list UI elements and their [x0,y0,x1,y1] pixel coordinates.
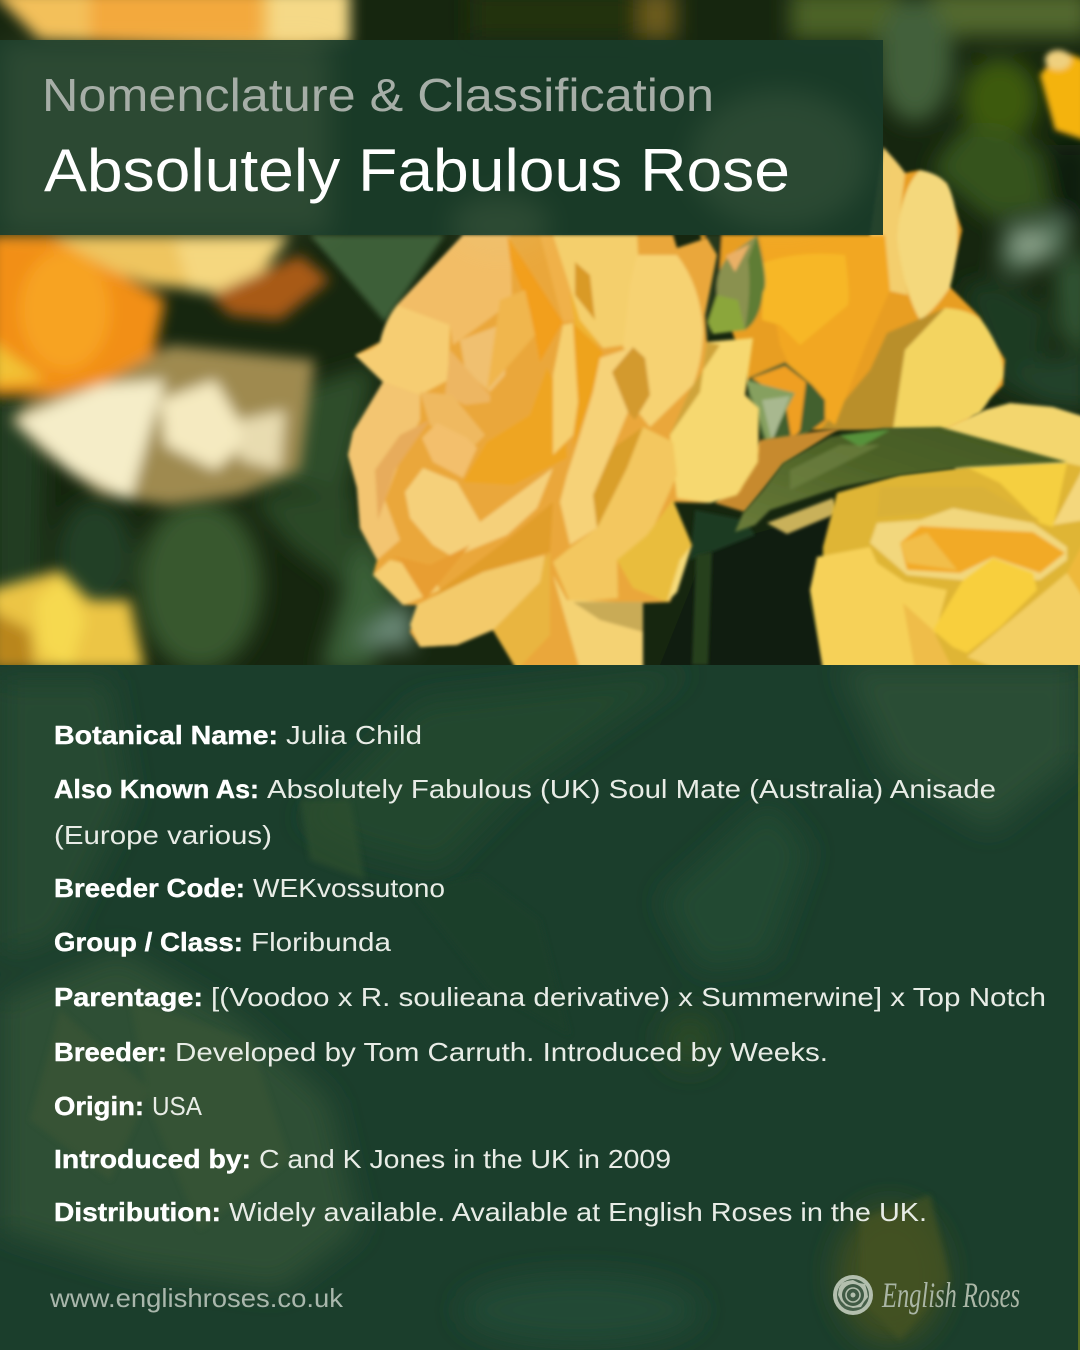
distribution: Distribution: [54,1197,221,1227]
icon: rose in circle [833,1275,873,1315]
blurred foliage [0,0,1080,670]
soft leaf upper centre [310,235,445,322]
also known as [54,774,996,850]
group / class: Floribunda [251,927,392,957]
icon: green rose bud [714,235,767,330]
origin: Origin: [54,1091,144,1121]
parentage: Parentage: [54,982,203,1012]
silhouette [348,235,759,670]
introduced by: Introduced by: [54,1144,251,1174]
left outer petals [355,305,450,395]
heading: subtitle: Nomenclature & Classification [42,69,714,121]
right orange rose behind [695,147,1005,447]
tan petal behind leaf [715,428,840,512]
botanical name: Botanical Name: [54,720,278,750]
bud near rose [702,235,724,336]
breeder code: Breeder Code: [54,873,245,903]
breeder: Breeder: [54,1037,167,1067]
parentage: [(Voodoo x R. soulieana derivative) x Summerwine] x Top Notch [211,982,1046,1012]
also known as: Also Known As: [54,774,259,804]
main rose [348,235,759,670]
heading: main title: Absolutely Fabulous Rose [44,137,790,204]
breeder code: WEKvossutono [253,873,445,903]
panel: details background [0,665,1080,1350]
also known as: (Europe various) [54,820,272,850]
blurred yellow rose top right [1040,50,1080,140]
botanical name [54,720,422,750]
origin: USA [152,1091,203,1121]
blurred top-left roses [0,0,350,670]
origin [54,1091,203,1121]
dark space under leaf [660,520,828,665]
group / class: Group / Class: [54,927,243,957]
right petals [553,235,640,348]
introduced by [54,1144,671,1174]
breeder code [54,873,445,903]
breeder: Developed by Tom Carruth. Introduced by Weeks. [175,1037,828,1067]
rose photograph background [0,0,1080,670]
lower left [405,468,553,557]
also known as: Absolutely Fabulous (UK) Soul Mate (Australia) Anisade [267,774,996,804]
footer website: www.englishroses.co.uk [49,1283,344,1313]
banner ghost foliage [0,40,870,255]
text block: rose details [54,720,1046,1227]
introduced by: C and K Jones in the UK in 2009 [259,1144,671,1174]
pale blurred rose [10,345,315,505]
group / class [54,927,392,957]
bottom left yellow rose [0,570,145,670]
logo: English Roses [833,1275,1020,1315]
logo wordmark: English Roses [881,1275,1020,1315]
distribution: Widely available. Available at English Roses in the UK. [229,1197,927,1227]
panel: title banner [0,40,883,255]
lower right yellow rose [810,403,1080,670]
green leaf [735,427,1067,532]
botanical name: Julia Child [286,720,422,750]
icon: small orange bud [748,362,825,447]
centre [507,235,563,362]
